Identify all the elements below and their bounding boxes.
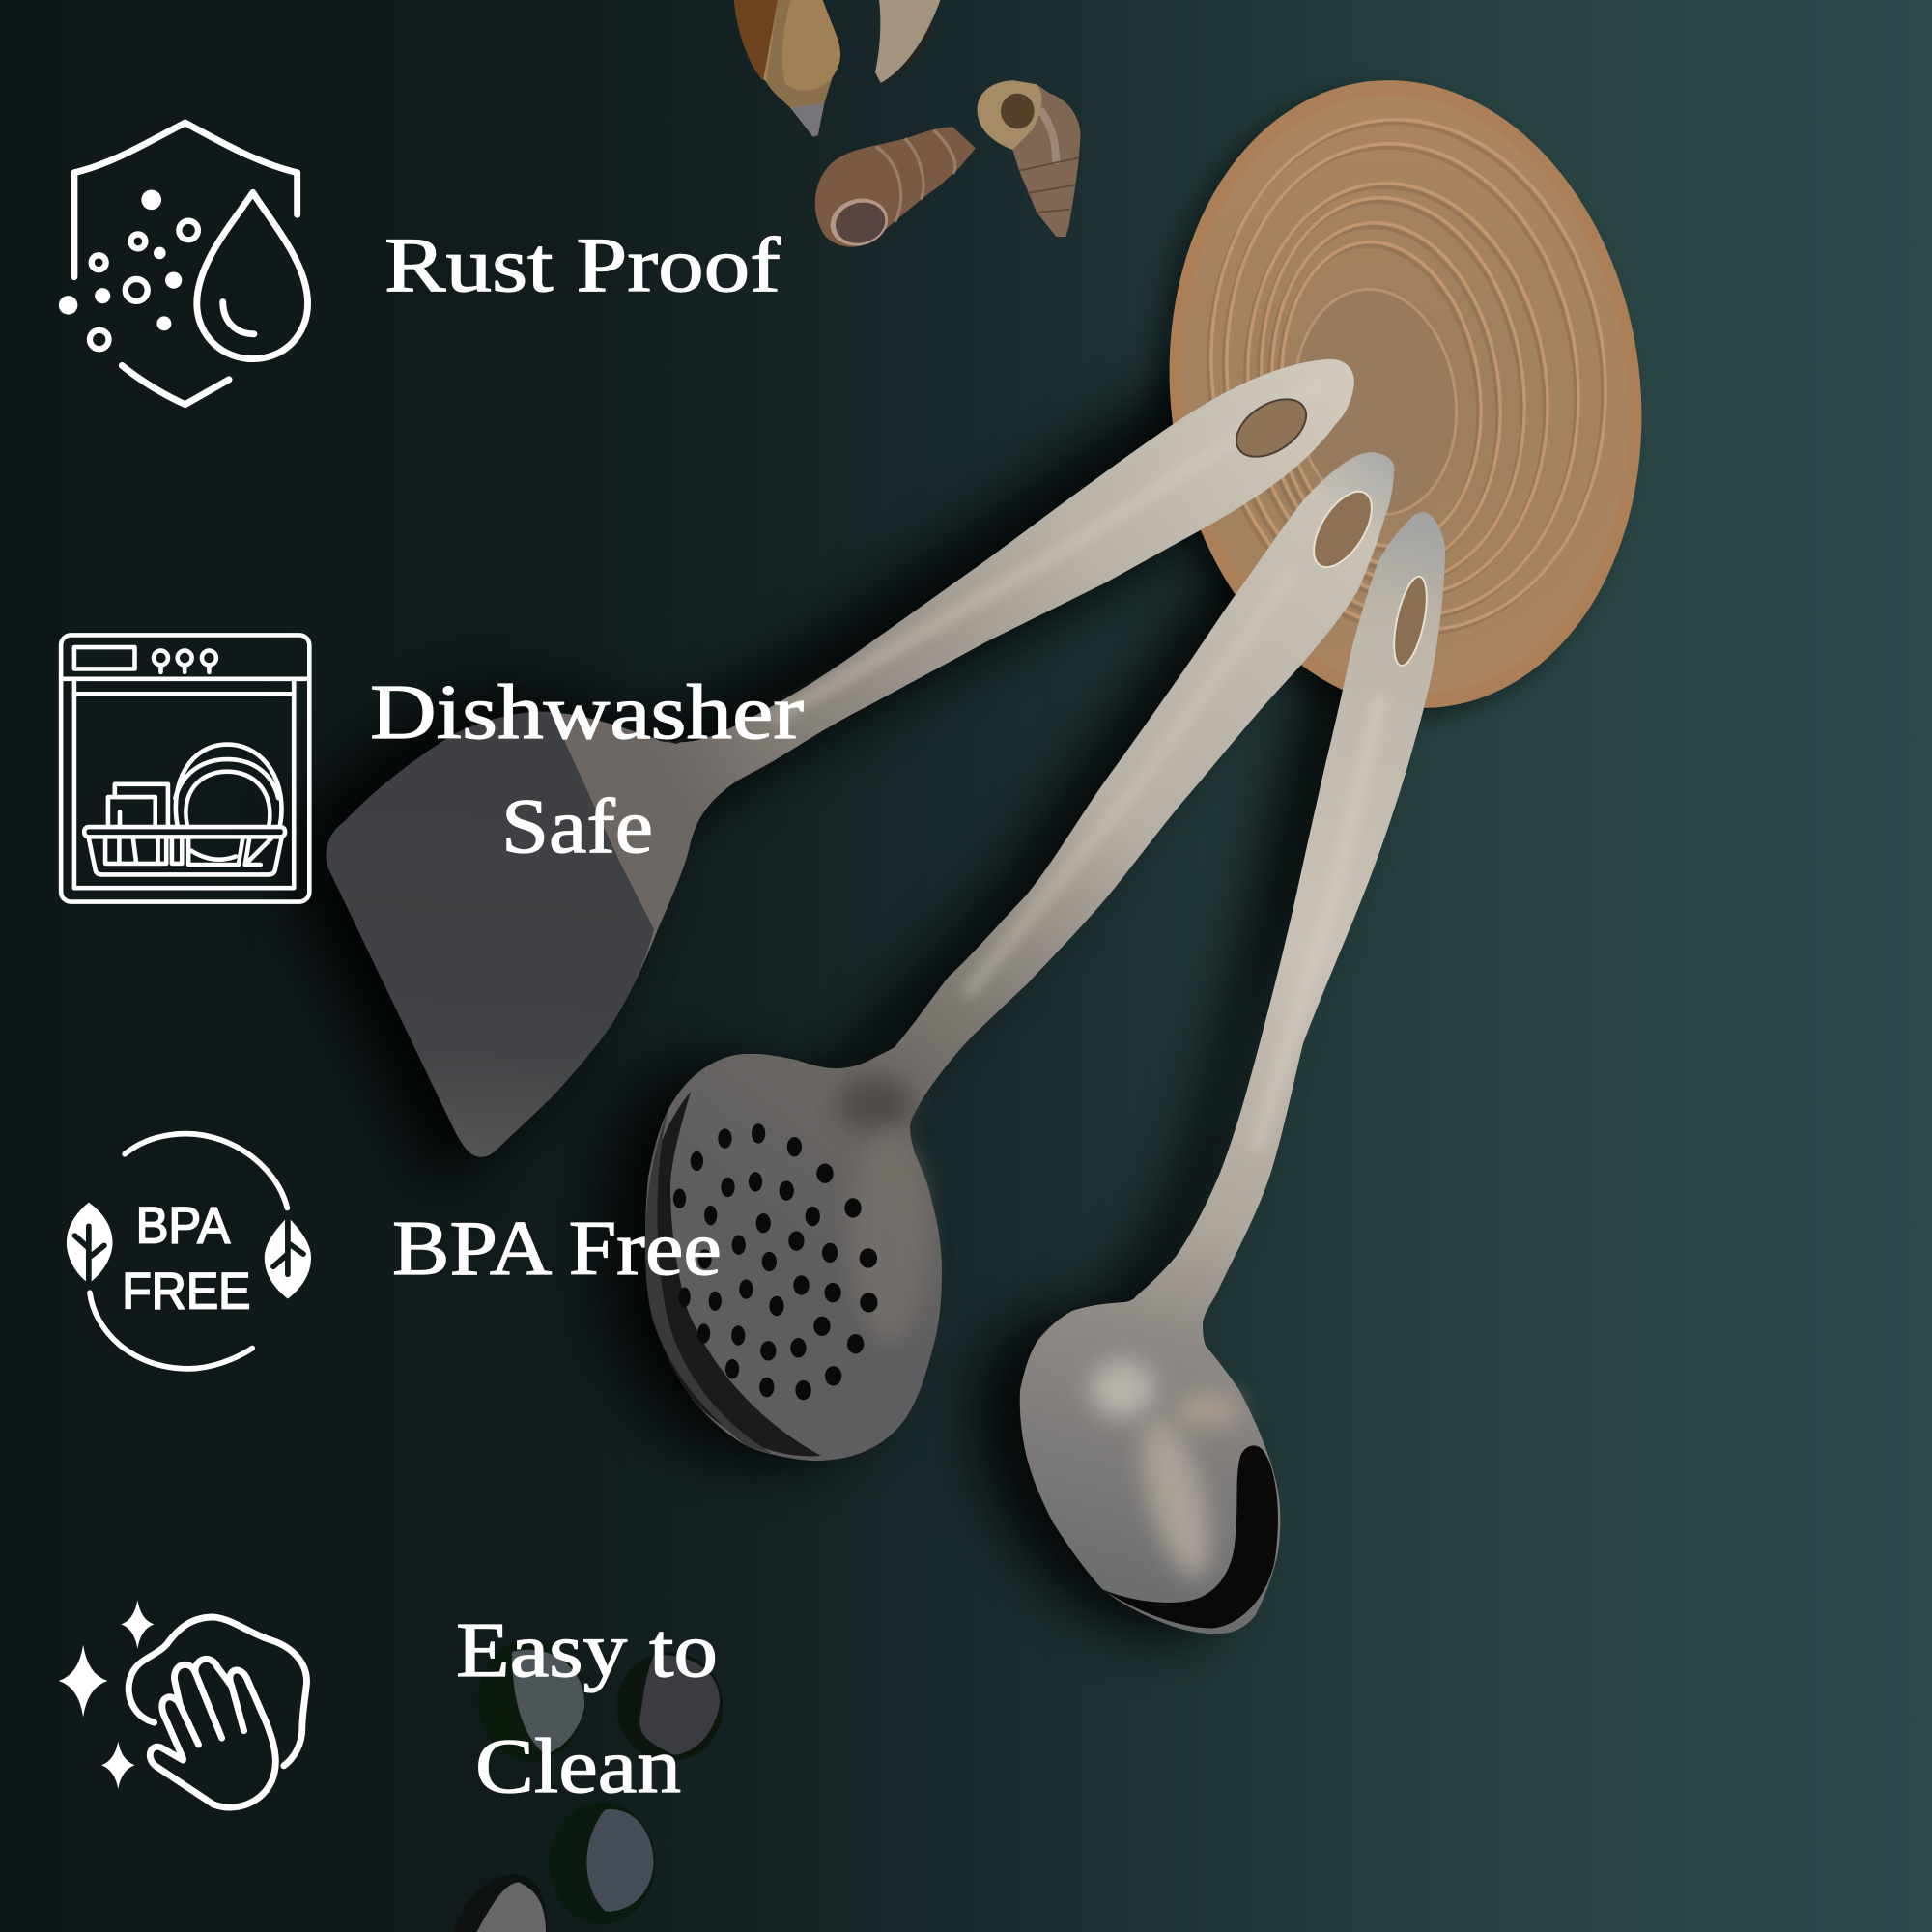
icon: BPA free: BPA (136, 1198, 231, 1255)
spatula (327, 359, 1354, 1157)
cast shadows (288, 338, 1401, 1639)
shell: top left cone (734, 0, 840, 137)
label: Rust Proof: Rust Proof (384, 223, 781, 308)
icon: BPA free: FREE (122, 1263, 250, 1320)
label: Easy to Clean: Easy to (456, 1608, 718, 1693)
shell: top right horn (875, 0, 940, 83)
serving spoon (1020, 512, 1445, 1634)
icon: dishwasher (61, 635, 309, 902)
label: Easy to Clean (456, 1608, 718, 1809)
label: Dishwasher Safe (370, 670, 804, 869)
plate (1120, 53, 1677, 745)
shell: right whelk (978, 80, 1080, 237)
stone 4 (454, 1874, 548, 1932)
label: Easy to Clean: Clean (475, 1724, 681, 1809)
photo: kitchen utensils on plate (288, 0, 1677, 1932)
label: Dishwasher Safe: Safe (501, 784, 653, 869)
shells (734, 0, 1080, 252)
stone 3 (549, 1802, 655, 1924)
shell: spiral (815, 127, 976, 252)
stones (454, 1639, 723, 1932)
label: Dishwasher Safe: Dishwasher (370, 670, 804, 755)
stone 2 (616, 1652, 723, 1761)
label: BPA Free: BPA Free (392, 1207, 722, 1292)
stone 1 (478, 1639, 584, 1761)
skimmer ladle (645, 452, 1394, 1461)
icon: easy to clean hand and sparkles (59, 1600, 306, 1807)
icon: rust proof shield and water drop (59, 123, 308, 405)
icon: BPA free (67, 1134, 311, 1369)
